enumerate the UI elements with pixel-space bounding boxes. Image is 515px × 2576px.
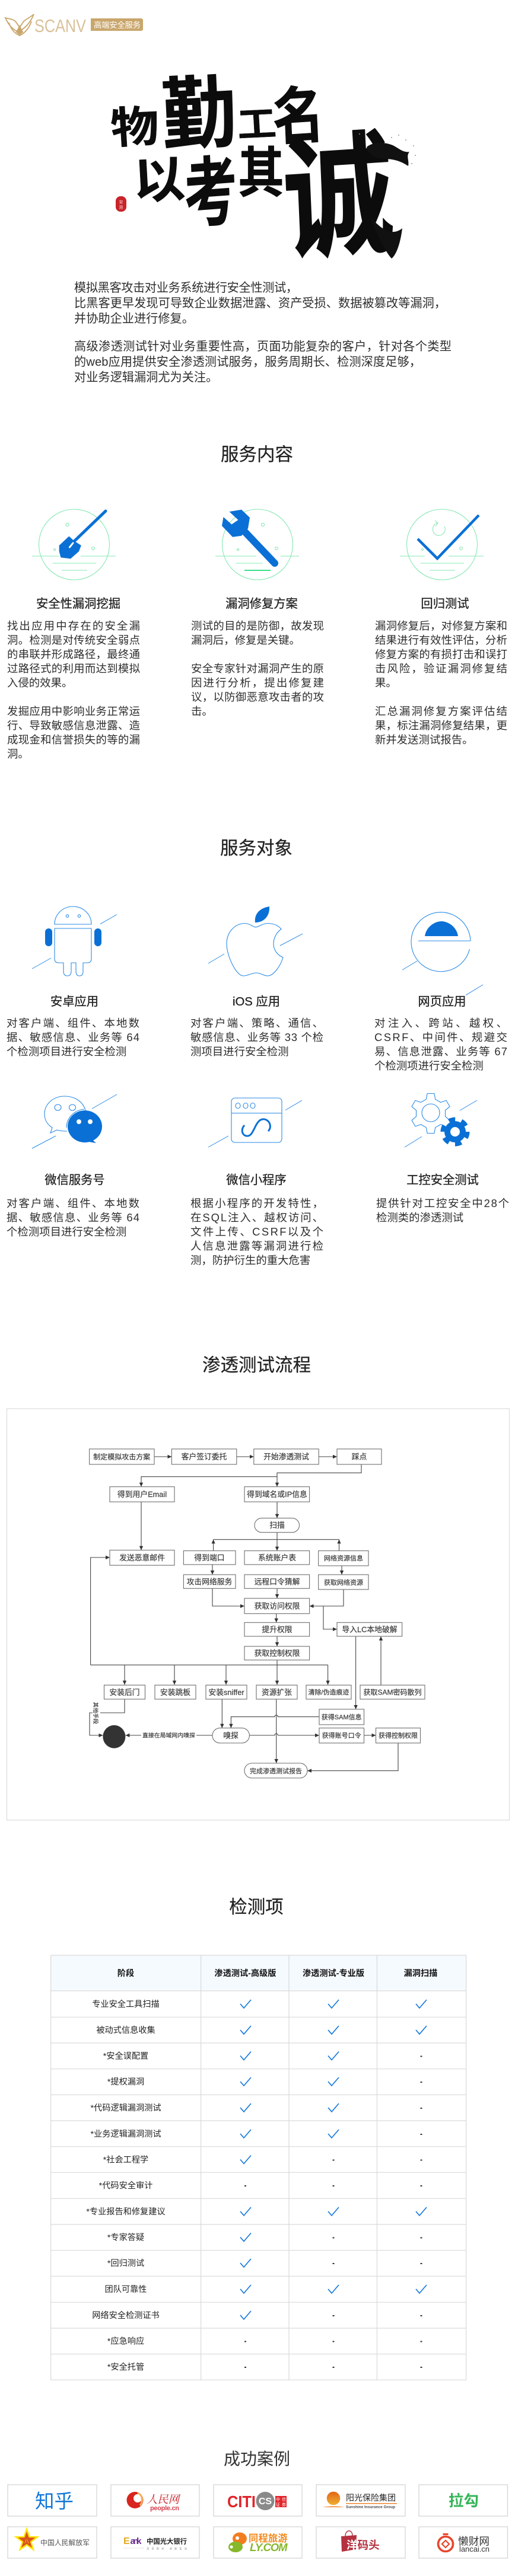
text block: 入侵的效果。 xyxy=(7,676,72,689)
text block xyxy=(375,620,507,746)
text block: 的串联并形成路径，最终通 xyxy=(7,648,140,660)
row 12: 团队可靠性 xyxy=(105,2285,147,2294)
card: Sunshine Insurance xyxy=(316,2485,405,2516)
heading: service targets: 服务对象 xyxy=(220,838,293,858)
step: backdoor xyxy=(104,1685,145,1699)
icon: shovel xyxy=(32,509,116,580)
card: China Everbright Bank: E xyxy=(123,2536,130,2546)
step: access rights xyxy=(244,1598,310,1614)
calligraphy title artwork: 工 xyxy=(236,95,278,148)
text block: 结果进行有效性评估，分析 xyxy=(375,634,507,646)
step: expansion xyxy=(256,1685,297,1699)
step: final report xyxy=(244,1763,307,1778)
title: 网页应用 xyxy=(418,995,466,1008)
step: plan: 制定模拟攻击方案 xyxy=(93,1453,150,1461)
text block: 测，防护衍生的重大危害 xyxy=(190,1254,310,1266)
step: account password xyxy=(319,1728,364,1743)
row 10: *专家答疑 xyxy=(107,2233,144,2242)
icon: gears xyxy=(405,1093,477,1147)
step: contract: 客户签订委托 xyxy=(182,1453,227,1461)
edge label: other means: 其他手段 xyxy=(93,1702,99,1724)
text block: 果。 xyxy=(375,676,397,689)
calligraphy title artwork: 名 xyxy=(271,65,326,157)
text block xyxy=(190,1197,323,1266)
row 9 xyxy=(86,2207,427,2217)
text block xyxy=(376,1197,509,1224)
heading: test items: 检测项 xyxy=(229,1897,284,1917)
intro text block: 比黑客更早发现可导致企业数据泄露、资产受损、数据被篡改等漏洞， xyxy=(74,296,446,310)
text block xyxy=(7,1197,139,1238)
step: clean traces xyxy=(306,1685,351,1699)
step: LC crack: 导入LC本地破解 xyxy=(342,1625,398,1634)
text block xyxy=(191,620,324,717)
row 5: *代码逻辑漏洞测试 xyxy=(90,2103,161,2113)
card: Zhihu: 知乎 xyxy=(35,2491,74,2512)
calligraphy title artwork: 物 xyxy=(109,91,161,157)
step: domain xyxy=(244,1487,310,1502)
step: domain: 得到域名或IP信息 xyxy=(247,1490,307,1499)
title: 工控安全测试 xyxy=(406,1173,479,1187)
step: expansion: 资源扩张 xyxy=(262,1688,292,1697)
card: CITIC Securities: 中信 xyxy=(276,2497,286,2502)
step: password guessing xyxy=(244,1575,310,1588)
row 9: *专业报告和修复建议 xyxy=(86,2207,166,2217)
calligraphy title artwork xyxy=(109,49,416,286)
step: sniff xyxy=(212,1728,249,1743)
text block: 修复方案的有损打击和误打 xyxy=(375,648,507,660)
step: terminal black node xyxy=(103,1725,125,1748)
badge xyxy=(91,18,143,31)
card: China Everbright Bank xyxy=(111,2527,199,2558)
row 11: *回归测试 xyxy=(107,2258,144,2268)
ink splash xyxy=(367,143,409,166)
seal: 测 xyxy=(119,205,123,210)
row 3: *安全误配置 xyxy=(103,2051,148,2061)
table header: 渗透测试-专业版 xyxy=(303,1968,364,1978)
card: Lancai xyxy=(419,2527,508,2558)
row 6: *业务逻辑漏洞测试 xyxy=(90,2130,161,2139)
step: scan xyxy=(255,1518,299,1533)
card: Lancai: 懒财网 xyxy=(458,2535,489,2547)
row 2: 被动式信息收集 xyxy=(96,2025,155,2035)
text block: 对客户端、组件、本地数 xyxy=(7,1017,139,1029)
step: sniff: 嗅探 xyxy=(223,1731,239,1740)
step: SAM info: 获得SAM信息 xyxy=(322,1713,362,1721)
text block: 易、信息泄露、业务等 67 xyxy=(374,1045,507,1058)
text block xyxy=(190,1017,323,1058)
row 8: *代码安全审计 xyxy=(99,2181,152,2191)
step: account password: 获得账号口令 xyxy=(322,1731,361,1739)
row 5 xyxy=(90,2103,422,2113)
card: Lagou xyxy=(419,2485,508,2516)
text block: 对客户端、组件、本地数 xyxy=(7,1197,139,1209)
step: sniffer: 安装sniffer xyxy=(208,1688,244,1697)
panel: wechat mini program xyxy=(190,1098,323,1266)
step: start: 开始渗透测试 xyxy=(263,1453,309,1461)
row 12 xyxy=(105,2285,427,2294)
step: jump host xyxy=(155,1685,196,1699)
panel: remediation plan xyxy=(191,509,324,717)
row 13 xyxy=(92,2310,422,2320)
text block: 在SQL注入、越权访问、 xyxy=(190,1211,323,1224)
step: network info xyxy=(319,1551,368,1566)
text block: 人信息泄露等漏洞进行检 xyxy=(190,1240,323,1252)
row 10 xyxy=(107,2233,422,2242)
card: CITIC Securities: 证券 xyxy=(276,2502,286,2507)
card: CITIC Securities xyxy=(214,2485,302,2516)
card: PLA xyxy=(8,2527,97,2558)
panel: flow chart xyxy=(7,1409,509,1820)
step: final report: 完成渗透测试报告 xyxy=(250,1767,302,1775)
row 1 xyxy=(92,1999,427,2009)
text block: 击风险，验证漏洞修复结 xyxy=(375,662,507,675)
step: password guessing: 远程口令猜解 xyxy=(255,1577,300,1587)
panel: wechat official account xyxy=(7,1094,139,1238)
step: accounts xyxy=(244,1551,310,1565)
row 11 xyxy=(107,2258,422,2268)
text block: 因进行分析，提出修复建 xyxy=(191,676,324,689)
card: People's Daily Online: 人民网 xyxy=(147,2494,181,2505)
intro text block: 并协助企业进行修复。 xyxy=(74,312,194,325)
step: plan xyxy=(90,1449,154,1464)
text block: 敏感信息、业务等 33 个检 xyxy=(190,1031,323,1043)
step: email: 得到用户Email xyxy=(117,1490,167,1499)
panel: android xyxy=(7,906,139,1058)
intro text block: 的web应用提供安全渗透测试服务，服务周期长、检测深度足够， xyxy=(74,355,421,369)
text block: 个检测项进行安全检测 xyxy=(374,1059,484,1072)
step: recon: 踩点 xyxy=(352,1453,367,1461)
step: SAM info xyxy=(319,1709,364,1725)
card: Yangmatou xyxy=(316,2527,405,2558)
panel: regression testing xyxy=(375,509,507,746)
card: CITIC Securities: CS xyxy=(259,2497,272,2507)
icon: check mark xyxy=(400,509,484,580)
row 1: 专业安全工具扫描 xyxy=(92,1999,160,2009)
text block: 据、敏感信息、业务等 64 xyxy=(7,1031,139,1043)
text block: 个检测项目进行安全检测 xyxy=(7,1225,126,1238)
heading: services: 服务内容 xyxy=(221,445,293,465)
step: accounts: 系统账户表 xyxy=(258,1553,296,1562)
step: phishing mail: 发送恶意邮件 xyxy=(119,1553,165,1562)
step: contract xyxy=(171,1449,237,1464)
step: get network resources: 获取网络资源 xyxy=(324,1578,363,1587)
card: LY.com: LY.COM xyxy=(250,2541,288,2553)
icon: web xyxy=(402,912,483,995)
step: SAM hash: 获取SAM密码散列 xyxy=(363,1687,422,1697)
step: final control: 获得控制权限 xyxy=(379,1731,418,1739)
step: phishing mail xyxy=(110,1550,174,1565)
text block: 据、敏感信息、业务等 64 xyxy=(7,1211,139,1224)
card: Yangmatou: 洋 xyxy=(346,2539,358,2552)
text block xyxy=(7,1017,139,1058)
row 15: *安全托管 xyxy=(107,2362,144,2372)
step: backdoor: 安装后门 xyxy=(109,1688,140,1697)
heading: success cases: 成功案例 xyxy=(224,2450,290,2468)
text block: 新并发送测试报告。 xyxy=(375,733,473,746)
step: get network resources xyxy=(319,1575,368,1589)
row 7: *社会工程学 xyxy=(103,2156,148,2165)
text block: 发掘应用中影响业务正常运 xyxy=(7,705,140,717)
table header: 漏洞扫描 xyxy=(404,1968,437,1978)
row 3 xyxy=(103,2051,422,2061)
text block: 行、导致敏感信息泄露、造 xyxy=(7,719,140,732)
step: recon xyxy=(337,1449,382,1464)
title: 安卓应用 xyxy=(50,995,98,1008)
step: privilege escalation xyxy=(244,1623,310,1636)
row 14: *应急响应 xyxy=(107,2336,144,2347)
text block: 个检测项目进行安全检测 xyxy=(7,1045,126,1058)
card: LY.com: 同程旅游 xyxy=(249,2533,287,2544)
text block: 漏洞后，修复是关键。 xyxy=(191,634,300,646)
card: China Everbright Bank: ank xyxy=(131,2536,142,2546)
card: China Everbright Bank: 中国光大银行 xyxy=(147,2537,187,2546)
edge label: sniff in LAN: 直接在局域网内嗅探 xyxy=(142,1731,195,1739)
text block: 过路径式的利用而达到模拟 xyxy=(7,662,140,675)
row 7 xyxy=(103,2156,422,2165)
calligraphy title artwork: 其 xyxy=(238,129,284,208)
text block: 成现金和信誉损失的等的漏 xyxy=(7,733,140,746)
row 13: 网络安全检测证书 xyxy=(92,2310,160,2320)
badge: 高端安全服务 xyxy=(94,20,141,30)
card: Lagou: 拉勾 xyxy=(449,2492,479,2510)
text block: 汇总漏洞修复方案评估结 xyxy=(375,705,507,717)
icon: wechat xyxy=(32,1094,117,1148)
title: 微信小程序 xyxy=(226,1173,287,1187)
icon: apple xyxy=(208,906,303,976)
title: 安全性漏洞挖掘 xyxy=(36,597,120,611)
title: 微信服务号 xyxy=(44,1173,105,1187)
card: CITIC Securities: CITI xyxy=(227,2492,256,2511)
step: email xyxy=(110,1487,174,1502)
panel: industrial control xyxy=(376,1093,509,1224)
card: China Everbright Bank: 共享阳光·创新生活 xyxy=(147,2547,187,2551)
calligraphy title artwork: 诚 xyxy=(279,87,397,286)
text block: 检测类的渗透测试 xyxy=(376,1211,463,1224)
step: privilege escalation: 提升权限 xyxy=(262,1625,293,1634)
step: sniffer xyxy=(206,1685,247,1699)
card: PLA: 中国人民解放军 xyxy=(40,2539,90,2547)
step: attack service xyxy=(183,1575,236,1588)
icon: wrench xyxy=(215,509,299,580)
step: network info: 网络资源信息 xyxy=(324,1554,363,1562)
table header: 渗透测试-高级版 xyxy=(214,1968,276,1978)
step: attack service: 攻击网络服务 xyxy=(187,1577,233,1587)
text block: CSRF、中间件、规避交 xyxy=(374,1031,507,1043)
logo: SCANV brand with badge xyxy=(5,14,143,36)
intro text block: 高级渗透测试针对业务重要性高，页面功能复杂的客户，针对各个类型 xyxy=(74,340,452,353)
calligraphy title artwork: 考 xyxy=(182,130,239,243)
step: jump host: 安装跳板 xyxy=(160,1688,190,1697)
row 4 xyxy=(107,2077,422,2087)
text block: 根据小程序的开发特性， xyxy=(190,1197,323,1209)
step: start xyxy=(254,1449,319,1464)
step: access rights: 获取访问权限 xyxy=(255,1602,300,1610)
seal: 安 xyxy=(119,199,123,205)
step: clean traces: 清除/伪造痕迹 xyxy=(308,1688,349,1696)
text block: 议，以防御恶意攻击者的攻 xyxy=(191,691,324,703)
title: 回归测试 xyxy=(421,597,469,611)
text block: 击。 xyxy=(191,705,213,717)
title: 漏洞修复方案 xyxy=(225,597,298,611)
text block xyxy=(374,1017,507,1072)
calligraphy title artwork: 以 xyxy=(131,139,186,213)
row 2 xyxy=(96,2025,427,2035)
card: Lancai: lancai.cn xyxy=(459,2545,489,2553)
card: People's Daily Online xyxy=(111,2485,199,2516)
icon: mini program window xyxy=(208,1098,302,1147)
step: LC crack xyxy=(337,1623,402,1636)
table: test item comparison xyxy=(51,1955,466,2380)
panel: vulnerability discovery xyxy=(7,509,140,760)
card: Sunshine Insurance: Sunshine Insurance Group xyxy=(346,2505,395,2509)
text block: 对客户端、策略、通信、 xyxy=(190,1017,323,1029)
text block: 提供针对工控安全中28个 xyxy=(376,1197,509,1209)
panel: web app xyxy=(374,912,507,1072)
table header: 阶段 xyxy=(117,1968,134,1978)
card: People's Daily Online: people.cn xyxy=(150,2505,179,2512)
table header xyxy=(51,1955,466,1991)
text block: 洞。 xyxy=(7,748,29,760)
text block: 找出应用中存在的安全漏 xyxy=(7,620,140,632)
calligraphy title artwork: 勤 xyxy=(158,49,239,167)
text block: 测试的目的是防御，故发现 xyxy=(191,620,324,632)
step: ports: 得到端口 xyxy=(194,1553,225,1562)
card: Yangmatou: 码头 xyxy=(357,2539,380,2552)
text block: 洞。检测是对传统安全弱点 xyxy=(7,634,140,646)
title: iOS 应用 xyxy=(233,995,280,1008)
text block: 漏洞修复后，对修复方案和 xyxy=(375,620,507,632)
icon: gold fox emblem xyxy=(5,14,34,36)
text block: 对注入、跨站、越权、 xyxy=(374,1017,507,1029)
text block: 文件上传、CSRF以及个 xyxy=(190,1225,323,1238)
step: control rights xyxy=(244,1646,310,1660)
card: Sunshine Insurance: 阳光保险集团 xyxy=(346,2493,396,2502)
card: PLA: 八 xyxy=(24,2539,29,2544)
card: LY.com xyxy=(214,2527,302,2558)
text block: 安全专家针对漏洞产生的原 xyxy=(191,662,324,675)
step: ports xyxy=(183,1551,236,1565)
icon: android xyxy=(32,906,117,976)
row 6 xyxy=(90,2130,422,2139)
text block: 果，标注漏洞修复结果，更 xyxy=(375,719,507,732)
intro text block xyxy=(74,281,452,384)
seal xyxy=(116,196,126,212)
text block: 测项目进行安全检测 xyxy=(190,1045,289,1058)
step: SAM hash xyxy=(360,1685,425,1699)
brand name: SCANV xyxy=(34,15,86,36)
row 4: *提权漏洞 xyxy=(107,2077,144,2087)
intro text block: 模拟黑客攻击对业务系统进行安全性测试， xyxy=(74,281,298,295)
step: control rights: 获取控制权限 xyxy=(255,1649,300,1658)
panel: iOS xyxy=(190,906,323,1058)
intro text block: 对业务逻辑漏洞尤为关注。 xyxy=(74,371,218,384)
arrows and connectors xyxy=(90,1457,398,1771)
step: scan: 扫描 xyxy=(269,1521,285,1530)
card: Zhihu xyxy=(8,2485,97,2516)
text block xyxy=(7,620,140,760)
step: final control xyxy=(376,1728,420,1743)
heading: penetration test flow: 渗透测试流程 xyxy=(202,1355,311,1375)
